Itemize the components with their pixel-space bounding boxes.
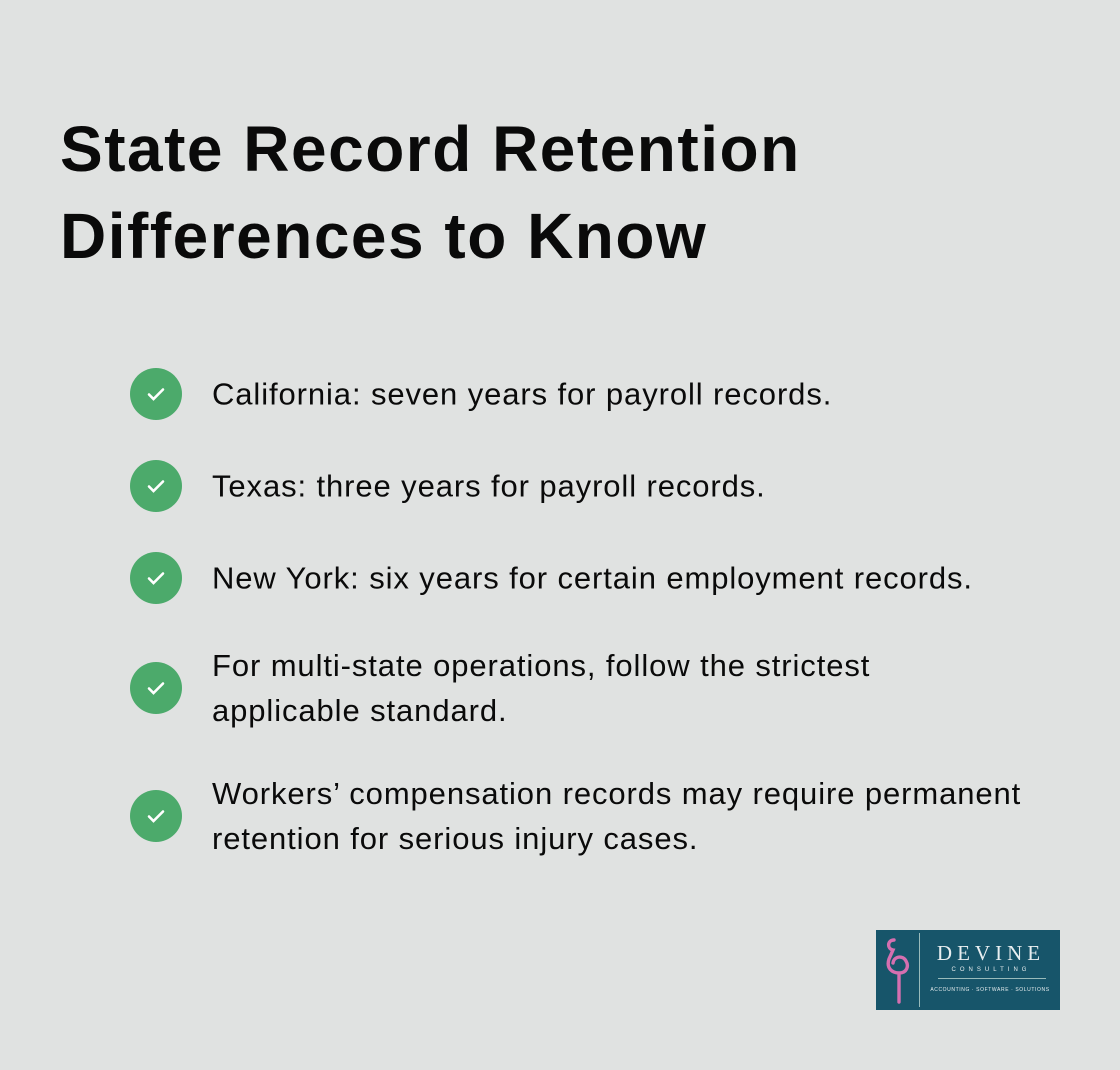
- item: New York: [130, 552, 973, 604]
- logo: DEVINE: [937, 941, 1045, 965]
- logo: [876, 930, 1060, 1010]
- title: State Record Retention: [60, 113, 801, 185]
- item: multi-state: For multi-state operations, follow the strictest: [212, 648, 870, 683]
- item: workers comp: Workers’ compensation records may require permanent: [212, 776, 1021, 811]
- item: multi-state: applicable standard.: [212, 693, 507, 728]
- item: California: California: seven years for payroll records.: [212, 376, 832, 412]
- item: multi-state: [130, 648, 870, 728]
- logo: CONSULTING: [952, 967, 1030, 973]
- item: Texas: [130, 460, 766, 512]
- item: New York: New York: six years for certain employment records.: [212, 560, 973, 596]
- title: [60, 113, 801, 272]
- title: Differences to Know: [60, 200, 707, 272]
- item: California: [130, 368, 832, 420]
- logo: ACCOUNTING · SOFTWARE · SOLUTIONS: [930, 987, 1050, 993]
- item: workers comp: retention for serious injury cases.: [212, 821, 698, 856]
- item: workers comp: [130, 776, 1021, 856]
- item: Texas: Texas: three years for payroll records.: [212, 468, 766, 504]
